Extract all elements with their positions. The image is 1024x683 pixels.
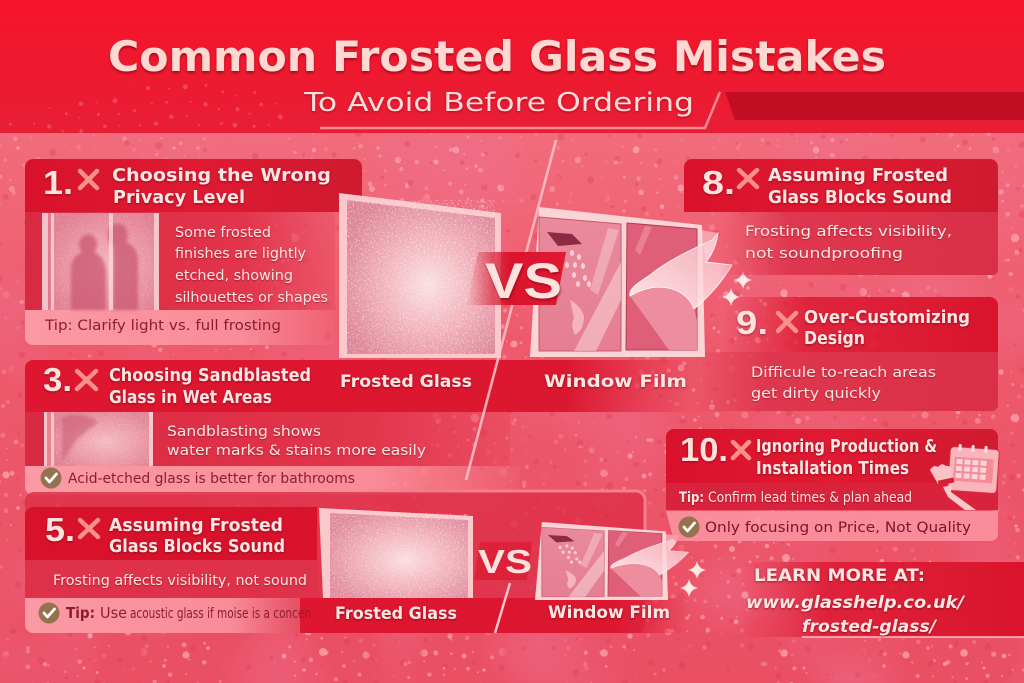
panel: mistake 8: [684, 159, 998, 275]
panel: mistake 3: [25, 360, 700, 495]
label: small window film: Window Film: [548, 603, 670, 623]
heading 8: Assuming Frosted: [768, 165, 948, 186]
learn more heading: LEARN MORE AT:: [754, 566, 925, 586]
comparison: frosted glass: [339, 193, 501, 358]
sparkle: [722, 288, 740, 306]
heading 1: Privacy Level: [113, 187, 245, 208]
illustration: small window film: [535, 522, 689, 600]
divider slash: [466, 140, 556, 480]
VS badge: [466, 252, 566, 309]
number 3: 3.: [43, 361, 72, 398]
heading 5: Glass Blocks Sound: [109, 536, 285, 557]
heading 3: Choosing Sandblasted: [109, 365, 311, 386]
number 9: 9.: [736, 304, 768, 341]
description 1: Some frosted: [175, 225, 271, 241]
small VS badge: VS: [478, 543, 532, 580]
number 10: 10.: [680, 431, 728, 468]
lower slash: [495, 583, 510, 633]
description 9: get dirty quickly: [751, 386, 881, 402]
label: small frosted glass: Frosted Glass: [335, 604, 457, 624]
heading 10: Installation Times: [756, 458, 909, 479]
illustration: shower glass stains: [44, 412, 153, 466]
description 3: water marks & stains more easily: [167, 443, 426, 459]
tip 5: acoustic glass if moise is a concen: [130, 606, 311, 622]
tip 10: Confirm lead times & plan ahead: [708, 490, 912, 506]
heading 9: Design: [804, 328, 865, 349]
number 5: 5.: [45, 511, 75, 548]
callout 10: Only focusing on Price, Not Quality: [705, 520, 971, 536]
panel: mistake 1: [25, 159, 362, 345]
heading 10: Ignoring Production &: [756, 436, 937, 457]
panel: mistake 5: [25, 491, 690, 633]
number 1: 1.: [43, 164, 73, 201]
link: frosted-glass/: [802, 617, 938, 637]
panel: mistake 10: [666, 429, 1000, 541]
label: frosted glass: Frosted Glass: [340, 372, 472, 392]
description 8: Frosting affects visibility,: [745, 224, 952, 240]
heading 9: Over-Customizing: [804, 307, 970, 328]
tip 5: Use: [100, 604, 127, 622]
tip 3: Acid-etched glass is better for bathrooms: [68, 471, 355, 487]
description 3: Sandblasting shows: [167, 424, 321, 440]
illustration: small frosted glass: [319, 508, 473, 598]
VS badge: VS: [485, 253, 562, 309]
label: window film: Window Film: [544, 372, 687, 392]
description 5: Frosting affects visibility, not sound: [53, 573, 307, 589]
icon: cross: [778, 313, 796, 331]
tip 1: Tip: Clarify light vs. full frosting: [44, 318, 281, 334]
sparkle: [688, 561, 706, 579]
description 9: Difficule to-reach areas: [751, 365, 936, 381]
link: www.glasshelp.co.uk/: [746, 593, 966, 613]
icon: cross: [739, 170, 757, 187]
description 8: not soundproofing: [745, 246, 903, 262]
icon: cross: [77, 371, 96, 389]
heading 8: Glass Blocks Sound: [768, 187, 952, 208]
icon: check: [38, 602, 60, 624]
number 8: 8.: [702, 164, 735, 201]
title: Common Frosted Glass Mistakes: [108, 32, 886, 81]
description 1: silhouettes or shapes: [175, 290, 328, 306]
tip 10: Tip:: [679, 490, 704, 506]
icon: cross: [80, 520, 98, 537]
heading 3: Glass in Wet Areas: [109, 387, 272, 408]
panel: learn more: [740, 562, 1024, 637]
sparkle: [680, 579, 698, 597]
icon: check: [40, 468, 62, 488]
illustration: silhouettes behind frosted glass: [42, 213, 159, 310]
subtitle: To Avoid Before Ordering: [303, 88, 694, 118]
heading 5: Assuming Frosted: [109, 515, 283, 536]
icon: cross: [80, 171, 97, 188]
tip 5: Tip:: [66, 604, 95, 622]
icon: check: [678, 516, 700, 538]
comparison: window film: [530, 207, 732, 357]
icon: cross: [733, 442, 749, 458]
icon: calendar and hand: [930, 443, 1000, 510]
sparkle: [734, 271, 752, 289]
description 1: finishes are lightly: [175, 246, 306, 262]
header ribbon: [320, 92, 1024, 128]
panel: mistake 9: [690, 297, 998, 411]
description 1: etched, showing: [175, 268, 293, 284]
heading 1: Choosing the Wrong: [112, 165, 331, 186]
